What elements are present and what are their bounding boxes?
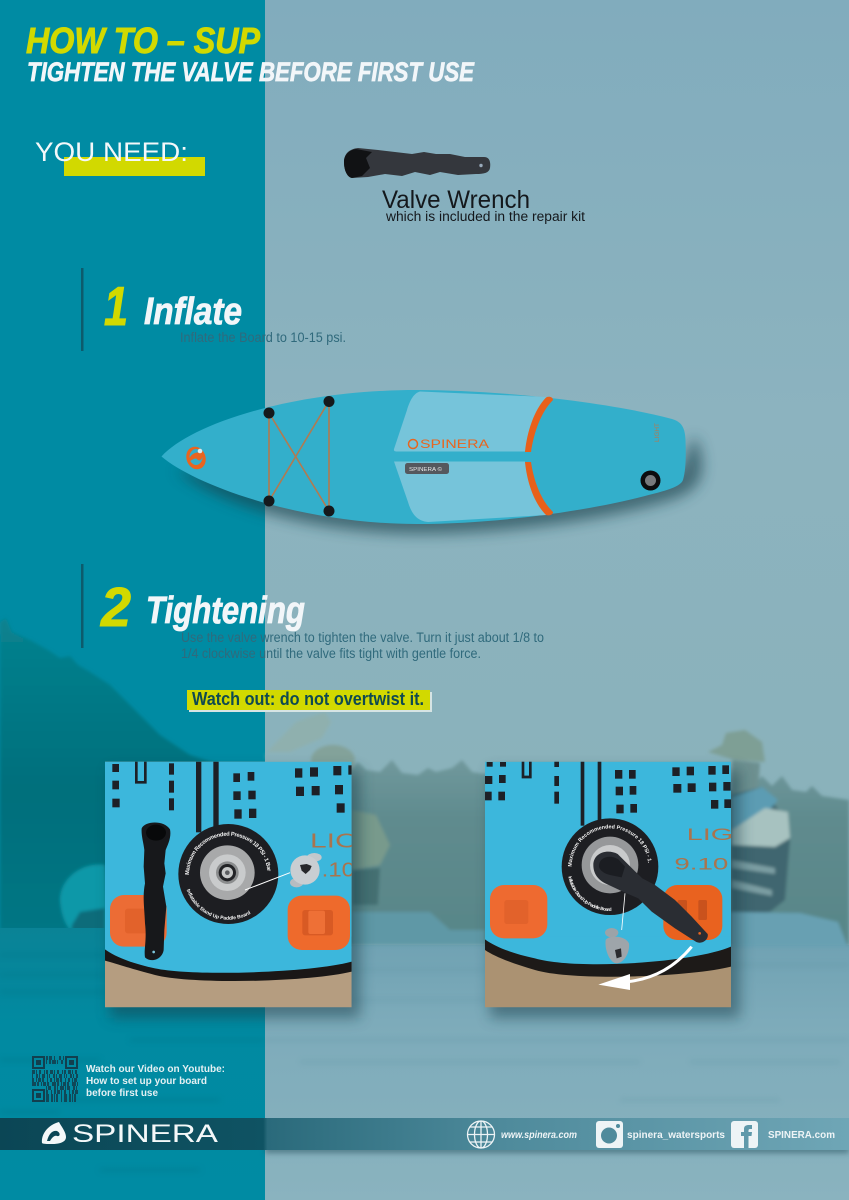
callout: watch out: Watch out: do not overtwist it. [192, 689, 424, 709]
valve disc [178, 824, 278, 924]
qr code [32, 1057, 78, 1101]
spinera logo: SPINERA [72, 1120, 218, 1148]
heading: how to sup: HOW TO – SUP [26, 20, 261, 61]
nose logo [183, 444, 209, 472]
step 1 heading: 1 [104, 275, 128, 337]
photo 2 shadow [490, 770, 740, 1018]
step 2 body text: 1/4 clockwise until the valve fits tight with gentle force. [181, 646, 481, 661]
video text: before first use [86, 1088, 159, 1099]
orange pads [490, 885, 722, 940]
kayak blob, left [58, 864, 105, 928]
icon: facebook [731, 1121, 758, 1148]
valve disc: Inflatable Stand Up Paddle Board [568, 876, 612, 911]
board lettering: 9.10 [674, 854, 728, 873]
board shadow [175, 436, 702, 534]
video text [86, 1064, 225, 1099]
light label: LIGHT [655, 423, 661, 442]
board lettering [676, 828, 731, 870]
photo 2: wrench on valve [485, 762, 731, 1008]
rotation arrow [598, 947, 692, 990]
valve disc [562, 818, 658, 915]
step 2 body text: Use the valve wrench to tighten the valve. Turn it just about 1/8 to [181, 630, 544, 645]
carry handle patch: SPINERA © [409, 466, 442, 473]
title [26, 20, 475, 87]
deck pad upper [394, 392, 547, 452]
photo 1 shadow [110, 770, 360, 1018]
d-rings [264, 396, 334, 516]
you need label: YOU NEED: [35, 137, 188, 167]
valve wrench caption: Valve Wrench [382, 186, 530, 214]
orange stripes [525, 397, 553, 452]
you need label [35, 137, 205, 176]
step 2 heading: 2 [100, 576, 131, 638]
step 1 body text: Inflate the Board to 10-15 psi. [180, 330, 346, 345]
instagram handle: spinera_watersports [627, 1129, 725, 1141]
photo 1: wrench beside valve [105, 762, 352, 1008]
spinera logo [42, 1120, 218, 1148]
kayak [731, 912, 848, 947]
bungee cords [269, 401, 329, 511]
valve cap [605, 893, 629, 963]
paddler figure 1 [311, 745, 390, 905]
carry handle patch [405, 463, 449, 474]
website: www.spinera.com [501, 1129, 577, 1141]
paddle under panel [264, 753, 265, 759]
icon: instagram [596, 1121, 623, 1148]
board lettering: LIC [310, 829, 357, 852]
board lettering: LIG [687, 825, 733, 844]
icon: globe [468, 1121, 495, 1148]
board lettering: .10 [322, 859, 355, 882]
valve disc: Maximum Recommended Pressure 18 PSI - 1 Bar [185, 832, 270, 875]
valve wrench caption: which is included in the repair kit [385, 209, 585, 224]
deck grip marks [112, 762, 352, 832]
deck pad lower [394, 462, 547, 522]
board lettering [312, 834, 352, 876]
footer bar [0, 1118, 849, 1150]
left teal panel [0, 0, 275, 1200]
board brand: SPINERA [420, 439, 489, 451]
board brand [408, 439, 489, 451]
facebook handle: SPINERA.com [768, 1129, 835, 1141]
step 1 heading [81, 268, 242, 351]
footer bar shadow [265, 1146, 849, 1153]
wrench on valve [593, 852, 708, 943]
step 2 body text [181, 630, 544, 661]
wrench [142, 822, 170, 960]
valve cap [245, 853, 322, 890]
step 2 heading [81, 564, 305, 648]
video text: How to set up your board [86, 1076, 207, 1087]
step 1 heading: Inflate [144, 291, 242, 333]
video text: Watch our Video on Youtube: [86, 1064, 225, 1075]
step 2 heading: Tightening [146, 590, 305, 632]
valve disc: Maximum Recommended Pressure 18 PSI - 1. [568, 824, 652, 866]
orange pads [110, 895, 350, 950]
kayak paddle [267, 712, 331, 752]
board valve [640, 470, 660, 490]
heading: tighten the valve: TIGHTEN THE VALVE BEFORE FIRST USE [27, 57, 475, 87]
valve disc: Inflatable Stand Up Paddle Board [186, 888, 250, 920]
icon: valve wrench [344, 148, 490, 178]
valve wrench caption [382, 186, 585, 224]
paddle board [162, 390, 686, 524]
deck grip marks [485, 762, 731, 826]
paddler figure 2 [708, 730, 790, 915]
